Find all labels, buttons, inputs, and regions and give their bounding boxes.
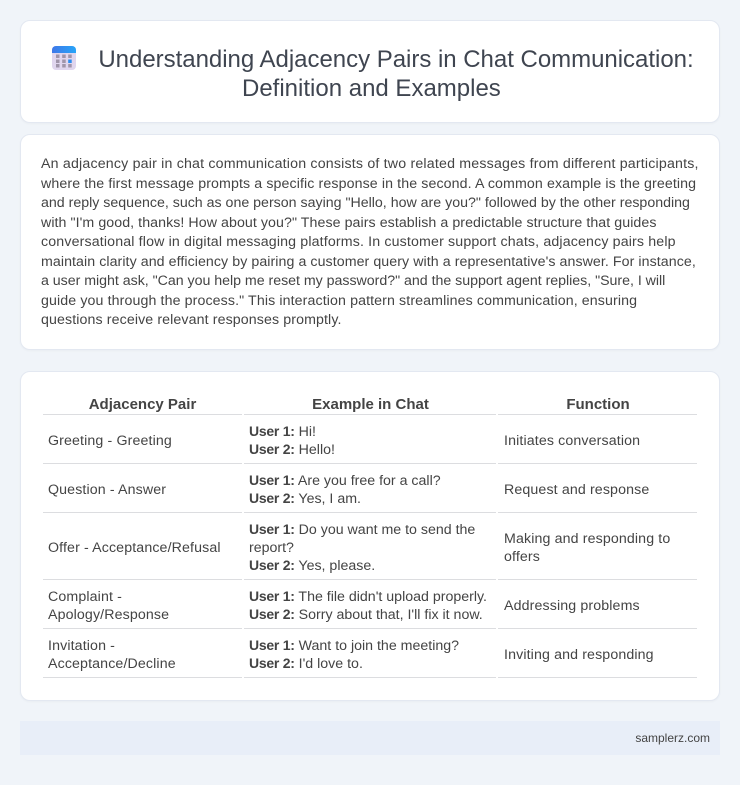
- table header: example in chat: Example in Chat: [312, 396, 429, 413]
- title: [98, 46, 694, 102]
- text block: description: [41, 156, 699, 328]
- text block: description: guide you through the process." This interaction pattern streamlines communication, ensuring: [41, 292, 637, 308]
- footer text: samplerz.com: [635, 731, 710, 745]
- table row: offer: offers: [504, 549, 540, 565]
- table row: offer: Offer - Acceptance/Refusal: [48, 540, 221, 556]
- text block: description: with "I'm good, thanks! How about you?" These pairs establish a predictable structure that guides: [41, 214, 657, 230]
- text block: description: where the first message prompts a specific response in the second. A common example is the greeting: [41, 176, 696, 192]
- text block: description: questions receive relevant responses promptly.: [41, 312, 342, 328]
- text block: description: and reply sequence, such as one person saying "Hello, how are you?" followed by the other responding: [41, 195, 690, 211]
- footer bar: [20, 721, 720, 755]
- table row: greeting: Initiates conversation: [504, 433, 640, 449]
- panel: title card: [20, 20, 720, 123]
- table row: invitation: Acceptance/Decline: [48, 656, 176, 672]
- table row: offer: [48, 521, 670, 574]
- table row: offer: User 2: Yes, please.: [249, 557, 375, 574]
- text block: description: a user might ask, "Can you help me reset my password?" and the support agent replies, "Sure, I will: [41, 273, 665, 289]
- title: Understanding Adjacency Pairs in Chat Communication:: [98, 46, 694, 73]
- table row: question: User 2: Yes, I am.: [249, 490, 361, 507]
- table row: invitation: Inviting and responding: [504, 647, 654, 663]
- table row: complaint: Apology/Response: [48, 607, 169, 623]
- icon: calendar grid: [52, 46, 76, 70]
- table header: function: Function: [566, 396, 630, 413]
- table row: greeting: User 2: Hello!: [249, 441, 335, 458]
- table row: question: Question - Answer: [48, 482, 166, 498]
- table row: invitation: User 1: Want to join the meeting?: [249, 637, 459, 654]
- panel: description card: [20, 134, 720, 350]
- table row: offer: Making and responding to: [504, 531, 670, 547]
- table row: offer: report?: [249, 540, 294, 556]
- table row: complaint: Complaint -: [48, 589, 122, 605]
- text block: description: conversational flow in digital messaging platforms. In customer support chats, adjacency pairs help: [41, 234, 676, 250]
- text block: description: An adjacency pair in chat communication consists of two related messages from different participants,: [41, 156, 699, 172]
- table row: offer: User 1: Do you want me to send the: [249, 521, 475, 538]
- table row: complaint: User 1: The file didn't upload properly.: [249, 588, 487, 605]
- text block: description: maintain clarity and efficiency by pairing a customer query with a representative's answer. For instance,: [41, 254, 696, 270]
- table row: question: Request and response: [504, 482, 649, 498]
- table row: complaint: Addressing problems: [504, 598, 640, 614]
- table row: complaint: [48, 588, 640, 623]
- table row: invitation: Invitation -: [48, 638, 115, 654]
- table header: adjacency pair: Adjacency Pair: [89, 396, 196, 413]
- table row: invitation: [48, 637, 654, 672]
- title: Definition and Examples: [242, 75, 501, 102]
- table row: greeting: Greeting - Greeting: [48, 433, 172, 449]
- table row: greeting: [48, 423, 640, 458]
- table row: invitation: User 2: I'd love to.: [249, 655, 363, 672]
- panel: table card: [20, 371, 720, 701]
- table row: complaint: User 2: Sorry about that, I'll fix it now.: [249, 606, 483, 623]
- table row: question: [48, 472, 649, 507]
- table row: question: User 1: Are you free for a call?: [249, 472, 441, 489]
- table row: greeting: User 1: Hi!: [249, 423, 316, 440]
